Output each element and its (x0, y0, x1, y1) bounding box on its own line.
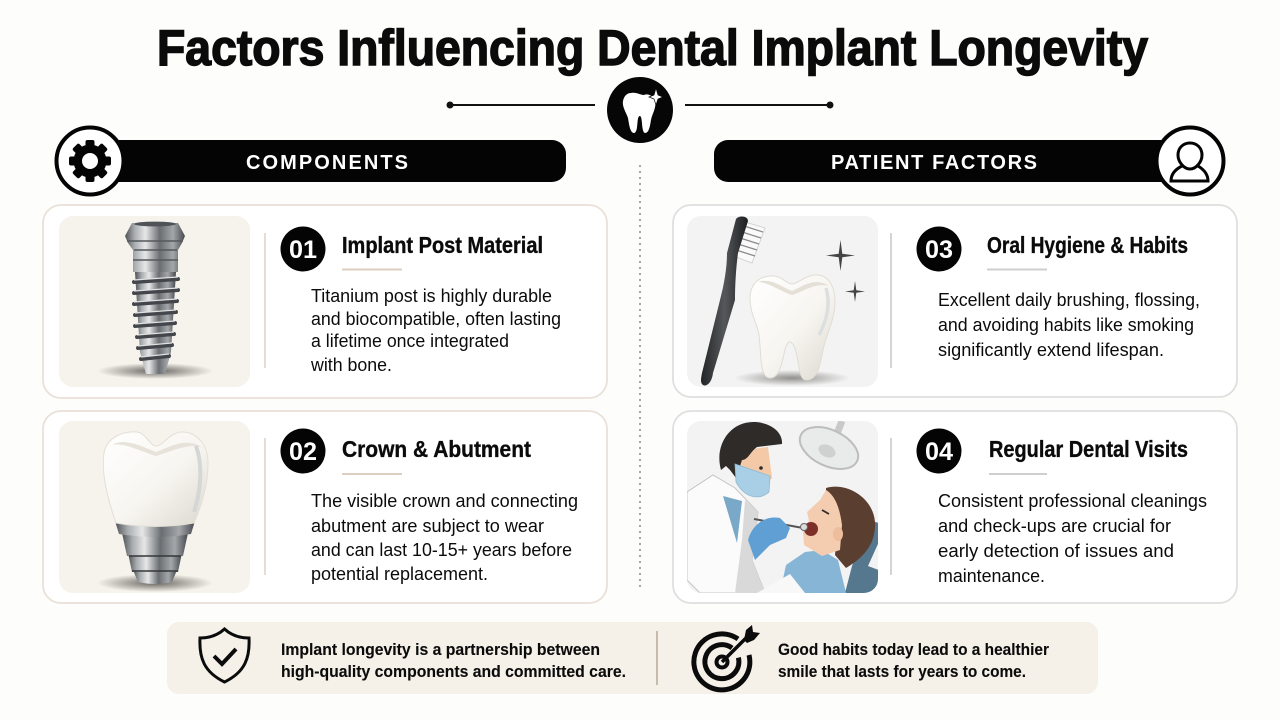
patient face (803, 490, 842, 556)
icon: gear (69, 140, 111, 182)
panel: oral hygiene and habits (673, 205, 1237, 397)
takeaway text 1: high-quality components and committed care. (281, 662, 626, 681)
text block 02: potential replacement. (311, 564, 488, 584)
text block 01: and biocompatible, often lasting (311, 309, 561, 329)
badge 01: 01 (289, 236, 317, 264)
illustration: dentist and patient (687, 419, 892, 593)
panel: takeaway band (167, 622, 1098, 694)
icon: tooth (734, 275, 850, 386)
patient eye (822, 510, 829, 514)
open mouth (804, 522, 818, 536)
icon: shield check (200, 629, 249, 682)
heading 04: Regular Dental Visits (989, 436, 1188, 462)
header: patient factors: PATIENT FACTORS (831, 152, 1037, 174)
badge 03: 03 (925, 236, 953, 264)
dentist face (736, 447, 772, 486)
header: components (56, 128, 566, 194)
glove (748, 517, 790, 560)
takeaway text 2 (778, 640, 1049, 681)
text block 03: and avoiding habits like smoking (938, 315, 1194, 335)
heading 01: Implant Post Material (342, 232, 543, 258)
badge 02 (280, 428, 326, 474)
sheet (757, 574, 805, 593)
text block 01 (310, 286, 561, 375)
text block 04: maintenance. (938, 566, 1045, 586)
takeaway text 2: smile that lasts for years to come. (778, 662, 1026, 681)
chair (846, 522, 878, 593)
title: Factors Influencing Dental Implant Longevity (157, 20, 1148, 76)
text block 04 (938, 491, 1207, 586)
icon: target with arrow (694, 625, 760, 690)
takeaway text 1 (281, 640, 626, 681)
heading 03: Oral Hygiene & Habits (987, 232, 1188, 258)
takeaway text 2: Good habits today lead to a healthier (778, 640, 1049, 659)
text block 02: and can last 10-15+ years before (311, 540, 572, 560)
title divider with tooth icon (446, 77, 834, 143)
text block 03 (938, 290, 1200, 360)
dentist coat (687, 475, 765, 593)
dentist hair (719, 422, 782, 478)
text block 01: a lifetime once integrated (311, 331, 509, 351)
scrub top (723, 496, 742, 543)
badge 04 (916, 428, 962, 474)
icon: person (1171, 143, 1208, 181)
badge 02: 02 (289, 438, 317, 466)
icon: crown on abutment (97, 432, 213, 592)
header: components: COMPONENTS (246, 152, 408, 174)
icon: toothbrush (701, 217, 765, 385)
heading 02: Crown & Abutment (342, 436, 531, 462)
text block 04: and check-ups are crucial for (938, 516, 1171, 536)
patient hair (826, 487, 875, 568)
icon: sparkles (826, 240, 865, 302)
text block 01: with bone. (310, 355, 392, 375)
text block 02 (311, 491, 578, 584)
mask (735, 464, 770, 497)
panel: crown and abutment (43, 411, 607, 603)
patient ear (833, 527, 843, 541)
panel: regular dental visits (673, 411, 1237, 603)
text block 03: Excellent daily brushing, flossing, (938, 290, 1200, 310)
takeaway text 1: Implant longevity is a partnership between (281, 640, 600, 659)
text block 02: abutment are subject to wear (311, 516, 544, 536)
lamp (798, 421, 860, 470)
text block 04: early detection of issues and (938, 541, 1174, 561)
header: patient factors (714, 128, 1224, 194)
panel: implant post material (43, 205, 607, 398)
dentist eye (759, 466, 763, 470)
text block 01: Titanium post is highly durable (311, 286, 552, 306)
badge 04: 04 (925, 438, 953, 466)
patient shirt (780, 550, 846, 593)
instrument (754, 519, 803, 528)
center dotted divider (639, 165, 641, 590)
text block 04: Consistent professional cleanings (938, 491, 1207, 511)
text block 02: The visible crown and connecting (311, 491, 578, 511)
coat shadow (735, 500, 765, 593)
badge 01 (280, 226, 326, 272)
text block 03: significantly extend lifespan. (938, 340, 1164, 360)
icon: titanium implant (97, 222, 213, 379)
badge 03 (916, 226, 962, 272)
